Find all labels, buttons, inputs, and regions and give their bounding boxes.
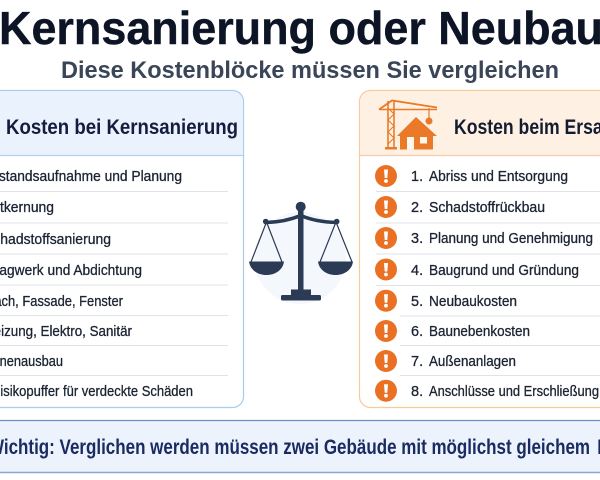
item numbers: 2. bbox=[411, 200, 423, 216]
list: Kernsanierung cost items bbox=[0, 169, 228, 400]
panel: Kosten beim Ersatzneubau bbox=[360, 90, 600, 408]
item labels: Baugrund und Gründung bbox=[429, 263, 579, 279]
item labels: Außenanlagen bbox=[429, 354, 516, 370]
item labels: Neubaukosten bbox=[429, 294, 517, 310]
icon: crane and house bbox=[379, 100, 437, 150]
panel header: Kernsanierung: Kosten bei Kernsanierung bbox=[6, 116, 238, 139]
item numbers: 4. bbox=[411, 263, 423, 279]
item labels bbox=[429, 169, 599, 400]
item numbers: 6. bbox=[411, 324, 423, 340]
item numbers: 1. bbox=[411, 169, 423, 185]
subtitle: Diese Kostenblöcke müssen Sie vergleichen bbox=[61, 57, 559, 84]
item numbers: 7. bbox=[411, 354, 423, 370]
item numbers: 3. bbox=[411, 231, 423, 247]
panel: Kosten bei Kernsanierung bbox=[0, 90, 244, 408]
icon: balance scale bbox=[249, 202, 353, 304]
item labels: Abriss und Entsorgung bbox=[429, 169, 568, 185]
item numbers bbox=[411, 169, 423, 400]
icons: orange warning circles bbox=[375, 165, 397, 402]
panel header: Ersatzneubau bbox=[360, 91, 600, 156]
callout: important note bbox=[0, 420, 600, 472]
item labels: Baunebenkosten bbox=[429, 324, 530, 340]
item labels: Schadstoffrückbau bbox=[429, 200, 545, 216]
panel header: Kernsanierung bbox=[0, 91, 243, 156]
list: Ersatzneubau cost items bbox=[375, 165, 600, 402]
item numbers: 5. bbox=[411, 294, 423, 310]
item numbers: 8. bbox=[411, 384, 423, 400]
